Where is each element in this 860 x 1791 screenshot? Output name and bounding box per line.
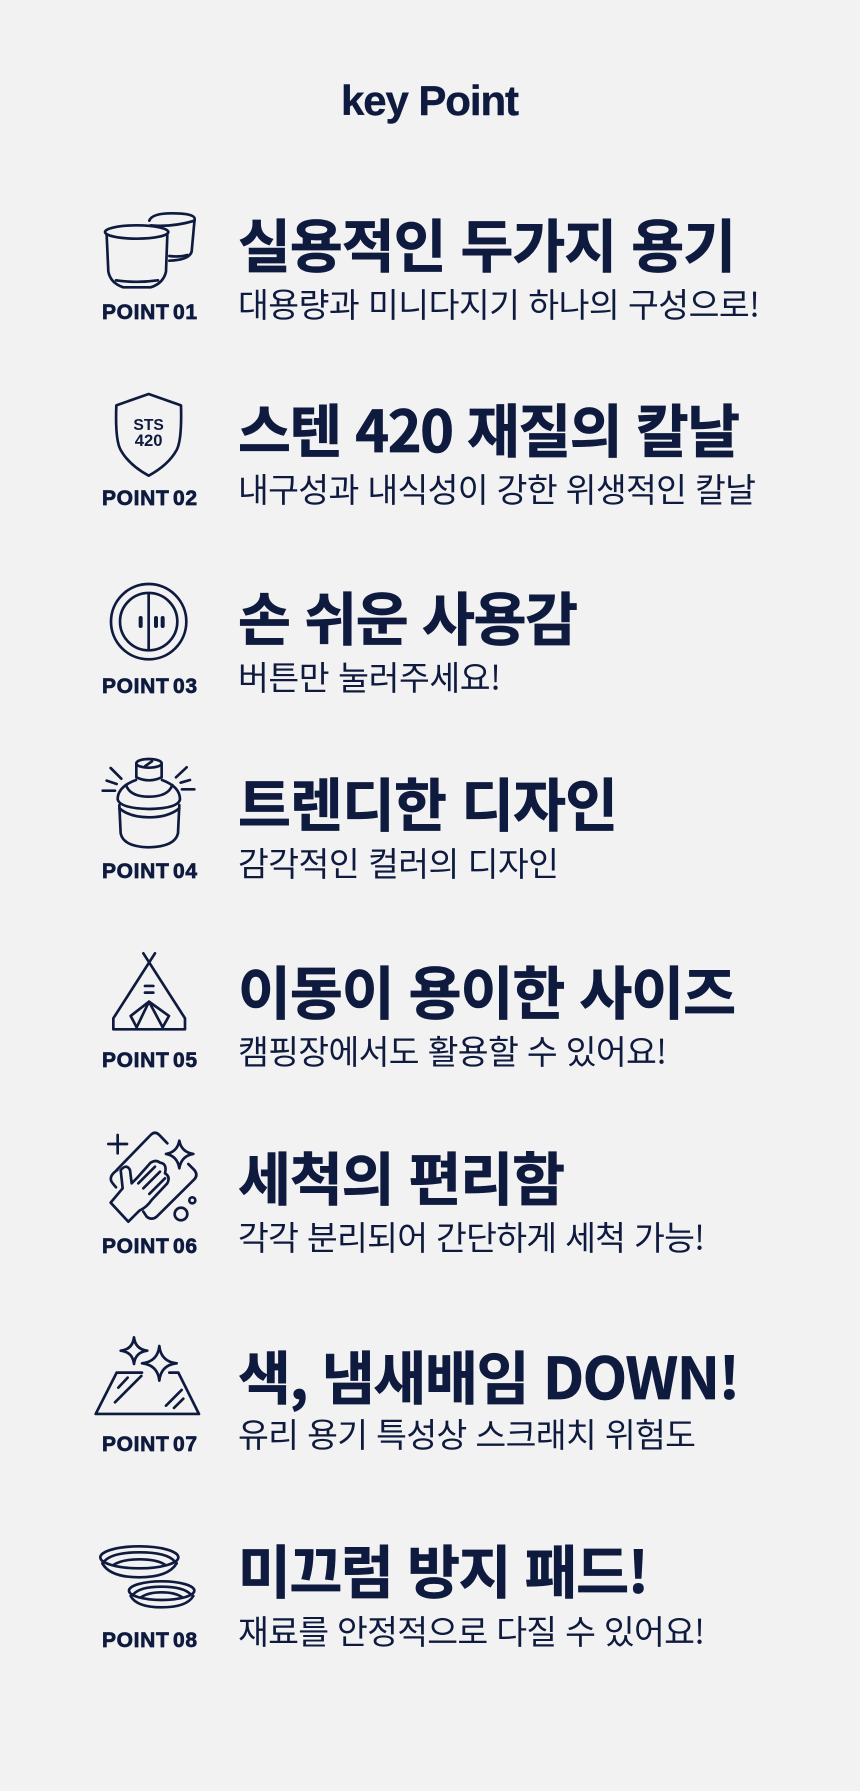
heading: 미끄럼 방지 패드! [238,1526,649,1610]
label: POINT 05 [102,1049,197,1072]
heading: 스텐 420 재질의 칼날 [238,385,740,469]
text block: 버튼만 눌러주세요! [238,651,501,700]
panel: point 07 [96,1332,740,1457]
icon: shield STS 420: STS [133,417,164,434]
icon: round button [111,584,186,659]
text block: 감각적인 컬러의 디자인 [238,837,559,886]
panel: point 06 [102,1133,705,1260]
heading: 이동이 용이한 사이즈 [238,947,736,1031]
label: POINT 08 [102,1629,197,1652]
text block: 대용량과 미니다지기 하나의 구성으로! [238,278,760,327]
panel: point 01 [102,200,760,327]
title: key Point [341,77,519,124]
heading: 세척의 편리함 [238,1133,565,1217]
heading: 손 쉬운 사용감 [238,573,578,657]
icon: tent [113,953,185,1029]
text block: 내구성과 내식성이 강한 위생적인 칼날 [238,463,756,512]
icon: two cups [105,213,195,287]
heading: 트렌디한 디자인 [238,759,618,843]
icon: washing hand [108,1133,196,1222]
label: POINT 07 [102,1433,197,1456]
icon: anti-slip pads [100,1546,194,1607]
label: POINT 06 [102,1235,197,1258]
panel: point 02 [102,385,756,512]
panel: point 08 [100,1526,705,1654]
label: POINT 02 [102,487,197,510]
panel: point 04 [102,759,618,886]
icon: shield STS 420 [116,394,181,476]
text block: 유리 용기 특성상 스크래치 위험도 [238,1408,696,1457]
text block: 각각 분리되어 간단하게 세척 가능! [238,1211,705,1260]
text block: 재료를 안정적으로 다질 수 있어요! [238,1605,705,1654]
icon: glass with sparkles [96,1337,199,1414]
icon: bottle [103,759,194,847]
panel: point 05 [102,947,736,1074]
heading: 실용적인 두가지 용기 [238,200,736,284]
label: POINT 04 [102,860,197,883]
text block: 캠핑장에서도 활용할 수 있어요! [238,1025,667,1074]
icon: shield STS 420: 420 [135,431,163,450]
heading: 색, 냄새배임 DOWN! [238,1332,740,1416]
label: POINT 01 [102,301,197,324]
label: POINT 03 [102,675,197,698]
panel: point 03 [102,573,578,700]
